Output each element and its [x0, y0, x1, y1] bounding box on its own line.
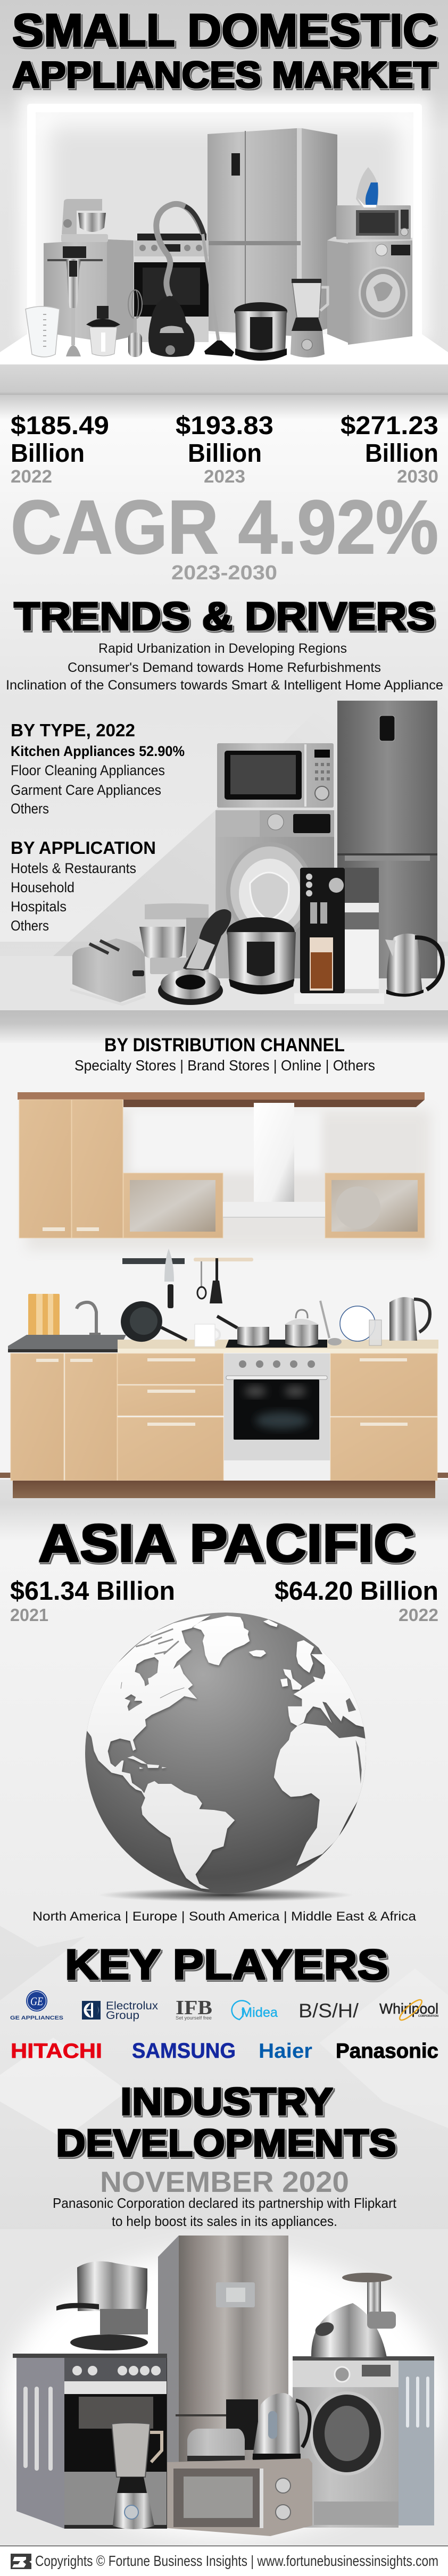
logo: Whirlpool: CORPORATION — [418, 2015, 438, 2018]
stat: 2030 market size: $271.23 — [341, 412, 438, 440]
stat: 2030 market size — [341, 412, 438, 487]
logo: Haier: Haier — [259, 2040, 312, 2063]
text block: panasonic development: Panasonic Corporation declared its partnership with Flipkart — [53, 2195, 397, 2211]
heading: asia pacific: ASIA PACIFIC — [38, 1514, 415, 1573]
heading: industry developments — [56, 2081, 396, 2165]
stat: 2023 market size: Billion — [188, 439, 262, 468]
background: stats and trends section — [0, 395, 448, 1010]
stat: asia pacific 2022: 2022 — [399, 1605, 438, 1625]
icon: dishwasher — [44, 239, 134, 342]
logo: Samsung: SAMSUNG — [132, 2039, 236, 2063]
stat: asia pacific 2022: $64.20 Billion — [275, 1577, 438, 1606]
icon: oven range — [134, 234, 209, 342]
logo: Electrolux Group: Electrolux — [106, 2000, 159, 2012]
logo: GE Appliances: GE APPLIANCES — [10, 2015, 63, 2021]
text block: by type: Others — [11, 801, 49, 817]
logo: Panasonic: Panasonic — [336, 2040, 438, 2063]
title: SMALL DOMESTIC — [12, 5, 437, 56]
icon: washing machine — [293, 2356, 434, 2528]
stat: asia pacific 2021: $61.34 Billion — [10, 1577, 175, 1606]
icon: dark refrigerator — [337, 701, 437, 978]
icon: stacked washer — [215, 810, 334, 978]
background: regional section — [0, 1541, 448, 2548]
icon: steel kettle — [385, 934, 443, 997]
text block: by application — [11, 838, 156, 934]
icon: canister vacuum cleaner — [148, 204, 234, 357]
CAGR headline: 2023-2030 — [171, 562, 277, 584]
logo: GE Appliances: GE — [30, 1995, 43, 2008]
title: APPLIANCES MARKET — [12, 54, 437, 96]
text block: trends list: Inclination of the Consumers towards Smart & Intelligent Home Appliance — [6, 678, 443, 693]
logo: fortune business insights — [11, 2554, 31, 2569]
logo: BSH: B/S/H/ — [298, 2000, 359, 2022]
illustration: kitchen upper wall units — [18, 1092, 425, 1238]
logo: GE Appliances — [10, 1990, 63, 2021]
text block: by application: Others — [11, 918, 49, 934]
icon: microwave oven — [167, 2458, 312, 2536]
text block: by type: Garment Care Appliances — [11, 782, 161, 798]
stat: 2030 market size: Billion — [365, 439, 438, 468]
logo: Electrolux Group: Group — [106, 2009, 139, 2022]
logo: Whirlpool — [379, 1997, 438, 2023]
stat: 2022 market size: 2022 — [11, 467, 52, 487]
icon: large steel refrigerator — [208, 128, 337, 336]
land masses — [80, 1615, 371, 1889]
stat: 2023 market size: 2023 — [204, 467, 245, 487]
panel: appliance room — [0, 104, 448, 364]
text block: by application: BY APPLICATION — [11, 838, 156, 858]
stat: 2030 market size: 2030 — [397, 467, 438, 487]
icon: food chopper — [86, 306, 120, 356]
text block: by type: BY TYPE, 2022 — [11, 720, 135, 740]
background: kitchen section — [0, 1010, 448, 1541]
illustration: countertop items — [8, 1294, 438, 1353]
text block: by application: Hospitals — [11, 899, 67, 915]
title — [12, 5, 437, 96]
icon: blender — [291, 279, 328, 358]
text block: by type: Floor Cleaning Appliances — [11, 762, 165, 778]
stat: asia pacific 2022 — [275, 1577, 438, 1625]
illustration: wall-hung utensils — [122, 1249, 253, 1308]
text block: trends list — [6, 641, 443, 693]
logo: IFB: Set yourself free — [176, 2015, 212, 2021]
text: other regions: North America | Europe | South America | Middle East & Africa — [32, 1909, 417, 1924]
text block: trends list: Rapid Urbanization in Developing Regions — [98, 641, 347, 656]
stat: asia pacific 2021: 2021 — [10, 1605, 48, 1625]
background: top section — [0, 0, 448, 395]
icon: whisk — [128, 290, 142, 357]
icon: chrome refrigerator — [158, 2236, 288, 2470]
heading: trends and drivers: TRENDS & DRIVERS — [14, 594, 435, 638]
icon: toaster — [187, 2429, 245, 2461]
text block: by application: Household — [11, 879, 74, 895]
logo: IFB: IFB — [176, 1997, 212, 2019]
stat: 2022 market size: $185.49 — [11, 412, 109, 440]
text block: panasonic development — [53, 2195, 397, 2229]
heading: key players: KEY PLAYERS — [65, 1941, 388, 1988]
icon: handheld vacuum — [183, 909, 231, 971]
logo: Hitachi: HITACHI — [11, 2040, 102, 2063]
icon: espresso machine — [56, 2261, 148, 2350]
footer — [0, 2546, 448, 2576]
heading: by distribution channel: BY DISTRIBUTION CHANNEL — [104, 1035, 345, 1056]
stat: 2023 market size: $193.83 — [176, 412, 273, 440]
stat: asia pacific 2021 — [10, 1577, 175, 1625]
illustration: globe — [80, 1613, 371, 1902]
text: distribution channels: Specialty Stores | Brand Stores | Online | Others — [74, 1057, 375, 1074]
icon: stand mixer — [139, 903, 209, 974]
illustration: kitchen base units — [0, 1353, 448, 1498]
stat: 2022 market size — [11, 412, 109, 487]
icon: steam iron — [356, 167, 378, 207]
icon: pressure cooker — [227, 917, 296, 994]
heading: industry developments: DEVELOPMENTS — [56, 2122, 396, 2165]
stat: 2023 market size — [176, 412, 273, 487]
icon: chrome blender — [112, 2423, 162, 2529]
text block: by application: Hotels & Restaurants — [11, 860, 136, 876]
text block: panasonic development: to help boost its sales in its appliances. — [112, 2213, 337, 2229]
date: november 2020: NOVEMBER 2020 — [100, 2165, 349, 2198]
logo: Electrolux Group — [82, 2000, 159, 2022]
icon: measuring cup — [26, 306, 60, 357]
icon: robot vacuum — [158, 969, 223, 1005]
stat: 2022 market size: Billion — [11, 439, 85, 468]
icon: microwave — [336, 205, 411, 239]
text block: trends list: Consumer's Demand towards Home Refurbishments — [68, 660, 381, 675]
logo: Whirlpool: Whirlpool — [379, 2000, 438, 2017]
icon: gas stove — [13, 2354, 167, 2529]
text block: by type: Kitchen Appliances 52.90% — [11, 743, 185, 759]
heading: industry developments: INDUSTRY — [120, 2081, 333, 2123]
icon: coffee machine — [294, 868, 384, 1004]
logo: Midea: Midea — [241, 2005, 278, 2020]
icon: chrome kettle — [252, 2393, 310, 2464]
channels, seas and rifts — [91, 1629, 362, 1784]
icon: washing machine — [327, 237, 412, 345]
icon: hand blender — [66, 259, 81, 356]
icon: small microwave — [217, 743, 334, 808]
icon: multi cooker — [234, 302, 287, 361]
logo: Midea — [232, 2001, 278, 2020]
icon: toaster — [70, 938, 146, 1004]
illustration: kitchen oven — [224, 1353, 330, 1481]
text block: by type — [11, 720, 185, 817]
icon: meat grinder — [311, 2273, 396, 2357]
icon: stand mixer — [61, 199, 108, 242]
